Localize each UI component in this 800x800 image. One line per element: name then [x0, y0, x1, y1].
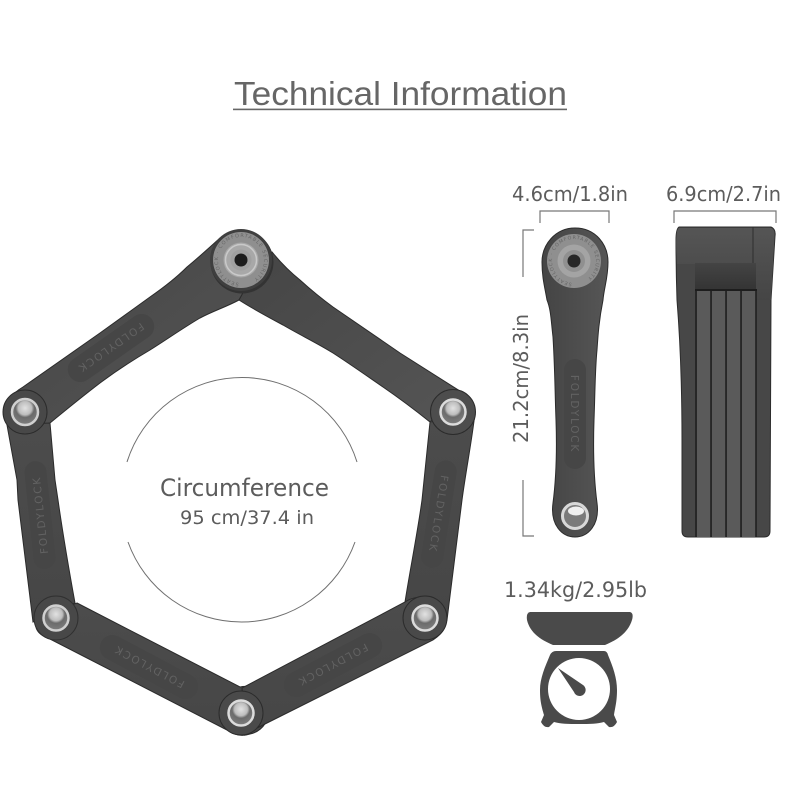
dimension: folded width: 4.6cm/1.8in — [512, 182, 628, 206]
label: foldylock — [95, 631, 203, 703]
circumference arc: bottom — [128, 542, 355, 622]
label: foldylock — [279, 629, 387, 701]
dimension: folded width — [512, 182, 628, 223]
dimension: folded length — [509, 230, 534, 536]
rivet: right — [440, 400, 466, 424]
circumference label — [160, 474, 329, 529]
circumference arc: top — [127, 377, 357, 462]
scale body — [540, 651, 617, 727]
label: foldylock — [564, 359, 586, 469]
label: foldylock: FOLDYLOCK — [426, 474, 450, 553]
weight label: 1.34kg/2.95lb — [504, 578, 647, 602]
folded lock: front view — [542, 228, 608, 538]
link: left — [7, 423, 75, 622]
rivet: lower left — [44, 606, 68, 630]
label: foldylock — [420, 459, 458, 569]
rivet: lower right — [412, 606, 438, 630]
top pivot: SEATYLOCK · COMFORTABLE SECURITY — [214, 233, 268, 286]
label: foldylock: FOLDYLOCK — [568, 375, 580, 453]
label: foldylock — [23, 460, 57, 570]
dimension: folded depth — [666, 182, 781, 223]
plates — [695, 290, 757, 537]
panel: unfolded lock — [2, 229, 476, 736]
bottom rivet — [562, 504, 588, 528]
label: foldylock: FOLDYLOCK — [75, 320, 146, 375]
circumference label: Circumference — [160, 474, 329, 502]
rivet: bottom — [228, 700, 254, 726]
label: foldylock: FOLDYLOCK — [295, 640, 370, 688]
label: foldylock: FOLDYLOCK — [112, 642, 187, 690]
joint ends — [3, 390, 47, 434]
dimension: folded length: 21.2cm/8.3in — [509, 314, 533, 443]
link: right — [405, 413, 475, 620]
circumference label: 95 cm/37.4 in — [180, 507, 314, 529]
rivet: left — [12, 399, 38, 425]
link: bottom left — [36, 603, 269, 735]
link: top right — [239, 252, 463, 422]
icon: kitchen scale — [527, 612, 633, 727]
scale bowl — [527, 612, 633, 645]
dimension: folded depth: 6.9cm/2.7in — [666, 182, 781, 206]
scale needle — [558, 668, 586, 696]
top body — [676, 228, 775, 300]
top hinge block — [695, 263, 756, 290]
title: Technical Information — [234, 75, 567, 112]
label: foldylock — [63, 309, 159, 387]
folded lock: side view — [676, 227, 775, 537]
label: foldylock: FOLDYLOCK — [31, 475, 51, 554]
top pivot: SEATYLOCK · COMFORTABLE SECURITY — [548, 236, 600, 286]
link: top left — [9, 238, 262, 430]
link: bottom right — [242, 597, 446, 735]
